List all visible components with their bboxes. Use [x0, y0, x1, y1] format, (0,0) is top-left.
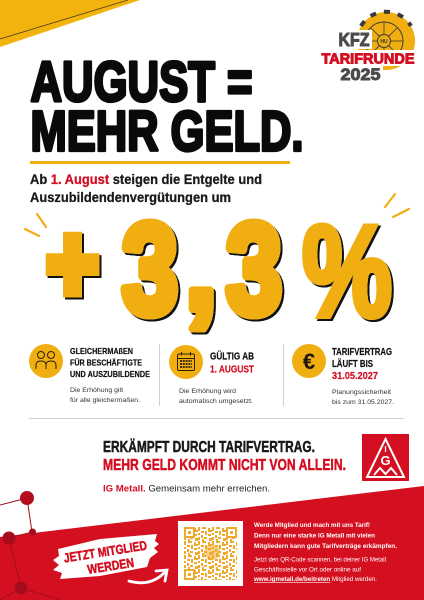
headline: MEHR GELD. — [30, 100, 304, 164]
membership text: Mitgliedern kann gute Tarifverträge erkämpfen. — [254, 543, 397, 550]
subheading — [30, 171, 262, 205]
info column: gleichermaßen: FÜR BESCHÄFTIGTE — [70, 358, 142, 368]
subheading: Ab 1. August steigen die Entgelte und — [30, 171, 262, 187]
big number +3,3% — [46, 197, 392, 344]
membership text: Jetzt den QR-Code scannen, bei deiner IG Metall — [254, 558, 386, 564]
info column: tarifvertrag: TARIFVERTRAG — [332, 347, 392, 358]
info column: gültig ab: automatisch umgesetzt. — [179, 398, 253, 405]
info column: tarifvertrag: Planungssicherheit — [332, 389, 391, 396]
logo: IG Metall: I — [384, 445, 387, 454]
divider — [283, 344, 284, 406]
logo: IG Metall — [362, 434, 409, 481]
membership text: Werde Mitglied und mach mit uns Tarif! — [254, 522, 370, 529]
icon: people — [29, 344, 63, 378]
horizontal rule — [29, 418, 404, 419]
slogan — [103, 439, 346, 494]
info column: gültig ab: GÜLTIG AB — [210, 350, 254, 362]
membership text: Denn nur eine starke IG Metall mit vielen — [254, 532, 375, 540]
slogan: IG Metall. Gemeinsam mehr erreichen. — [103, 484, 270, 494]
logo: KFZ Tarifrunde 2025: HU — [380, 39, 388, 45]
logo: KFZ Tarifrunde 2025: KFZ — [338, 30, 370, 50]
call to action badge — [53, 534, 159, 580]
big number +3,3%: , — [184, 197, 218, 336]
icon: calendar — [169, 345, 203, 379]
big number +3,3%: 3 — [122, 198, 178, 341]
big number +3,3%: % — [302, 198, 392, 344]
headline — [30, 50, 304, 164]
big number +3,3%: 3 — [226, 198, 282, 341]
info column: gleichermaßen: Die Erhöhung gilt — [70, 387, 123, 394]
network nodes — [0, 491, 60, 600]
info column: gleichermaßen: für alle gleichermaßen. — [70, 397, 140, 404]
red footer band — [0, 486, 424, 600]
info column: gleichermaßen: GLEICHERMAßEN — [70, 346, 133, 356]
membership text: Geschäftsstelle vor Ort oder online auf — [254, 568, 361, 574]
call to action badge: WERDEN — [86, 555, 135, 577]
info column: gültig ab: Die Erhöhung wird — [179, 388, 236, 395]
membership text — [253, 522, 397, 583]
sparkle rays — [25, 194, 409, 236]
big number +3,3%: + — [46, 202, 98, 324]
arrow — [129, 570, 167, 583]
icon: euro: € — [303, 349, 315, 374]
call to action badge: JETZT MITGLIED — [63, 538, 148, 566]
info column: gleichermaßen — [29, 344, 150, 404]
headline: AUGUST = — [30, 50, 252, 114]
logo: IG Metall: G — [380, 453, 391, 468]
QR code — [178, 521, 243, 586]
logo: KFZ Tarifrunde 2025: TARIFRUNDE — [322, 50, 414, 68]
info column: gleichermaßen: UND AUSZUBILDENDE — [70, 369, 150, 379]
subheading: Auszubildendenvergütungen um — [30, 189, 231, 205]
slogan: MEHR GELD KOMMT NICHT VON ALLEIN. — [103, 457, 346, 474]
info column: gültig ab — [169, 345, 254, 405]
info column: gültig ab: 1. AUGUST — [210, 364, 254, 376]
slogan: ERKÄMPFT DURCH TARIFVERTRAG. — [103, 439, 315, 456]
info column: tarifvertrag: bis zum 31.05.2027. — [332, 399, 394, 406]
divider — [159, 344, 160, 406]
membership text: www.igmetall.de/beitreten Mitglied werden. — [253, 577, 377, 583]
gold rule — [30, 161, 290, 164]
top-left yellow corner — [0, 0, 140, 47]
info column: tarifvertrag: 31.05.2027 — [332, 371, 378, 382]
logo: KFZ Tarifrunde 2025 — [320, 12, 416, 84]
logo: KFZ Tarifrunde 2025: 2025 — [340, 65, 380, 84]
info column: tarifvertrag — [292, 344, 394, 406]
info column: tarifvertrag: LÄUFT BIS — [332, 357, 373, 370]
